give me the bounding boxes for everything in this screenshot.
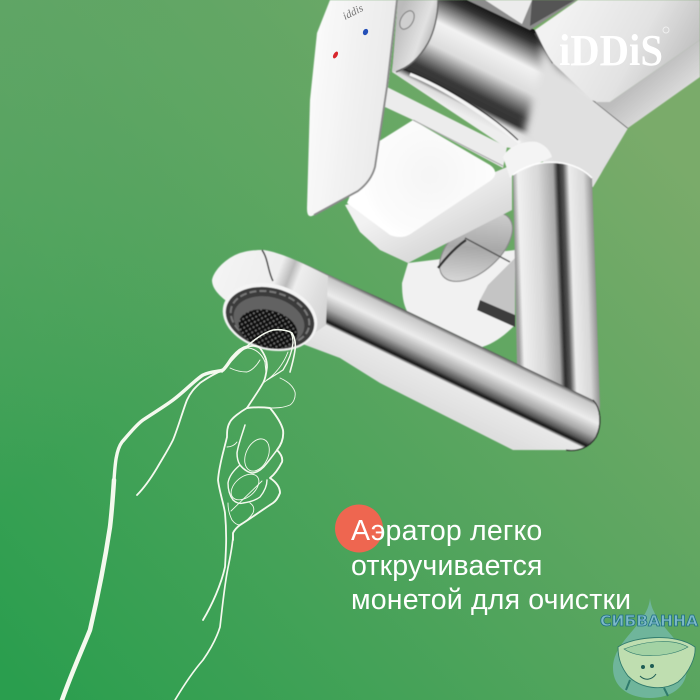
- ring screw: [397, 8, 417, 32]
- disc shadow: [477, 300, 515, 327]
- chrome strip: [410, 74, 520, 143]
- wall disc: [402, 250, 515, 347]
- logo mark: [663, 27, 669, 33]
- aerator: [215, 273, 325, 361]
- disc cylinder: [480, 258, 515, 316]
- watermark legs: [626, 680, 668, 696]
- iddis block lower face: [595, 40, 700, 128]
- caption: откручивается: [351, 550, 543, 582]
- hand outline: [62, 330, 295, 700]
- fingers: [233, 407, 283, 540]
- palm line: [203, 408, 247, 620]
- chrome ring: [427, 200, 525, 294]
- loop over the mesh: [222, 330, 295, 372]
- thin lines: [226, 360, 295, 525]
- back of hand: [114, 347, 247, 480]
- aerator head: [212, 250, 328, 343]
- horizontal spout: [260, 250, 600, 450]
- watermark face: [640, 664, 656, 679]
- forearm: [62, 480, 114, 700]
- lower block underside: [345, 165, 512, 263]
- caption: монетой для очистки: [351, 584, 631, 616]
- watermark tub: [618, 638, 695, 688]
- logo: iDDiS: [559, 26, 663, 75]
- upper chrome wedge: [467, 0, 577, 30]
- watermark: [600, 598, 698, 698]
- faucet: [212, 0, 700, 450]
- icon: blue dot: [362, 28, 369, 36]
- body light side: [518, 41, 622, 186]
- thumb: [267, 333, 293, 380]
- highlight circle: [335, 504, 383, 552]
- watermark text: СИБВАННА: [600, 612, 698, 630]
- vertical tube: [513, 162, 600, 430]
- wrist: [175, 537, 233, 700]
- handle logo: iddis: [341, 2, 365, 23]
- lever handle: [307, 0, 398, 216]
- lower block top: [347, 120, 495, 237]
- icon: red dot: [332, 51, 339, 59]
- band to joint: [385, 87, 507, 168]
- glass ring: [392, 0, 438, 72]
- mesh: [234, 303, 302, 355]
- tube collar: [503, 142, 552, 178]
- iddis block face: [535, 0, 700, 103]
- central body: [392, 0, 628, 187]
- caption: Аэратор легко: [351, 515, 542, 547]
- watermark drop: [613, 598, 687, 698]
